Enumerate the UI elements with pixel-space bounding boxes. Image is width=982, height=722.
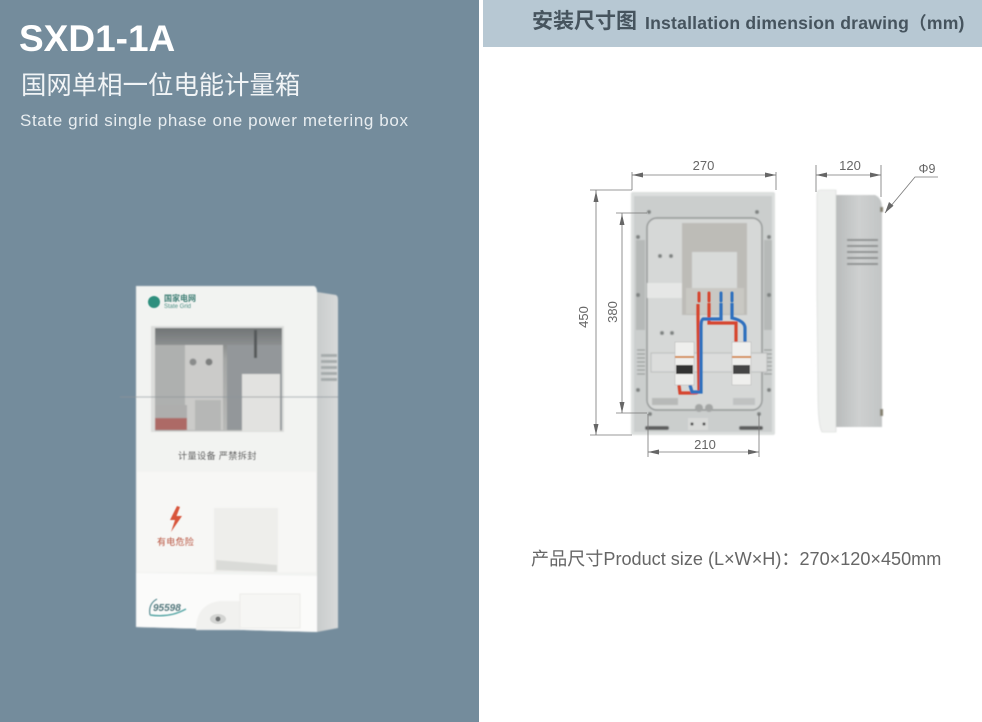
logo: state grid: State Grid bbox=[164, 304, 191, 310]
dimension: height 450 bbox=[576, 190, 632, 435]
label: metering notice: 计量设备 严禁拆封 bbox=[178, 450, 257, 461]
dimension: mounting height 380: 380 bbox=[605, 301, 620, 323]
heading: English installation drawing: Installation dimension drawing（mm) bbox=[645, 13, 965, 33]
dimension: depth 120 bbox=[816, 158, 881, 197]
logo: state grid: 国家电网 bbox=[164, 293, 196, 303]
icon: lightning warning: 有电危险 bbox=[157, 536, 194, 547]
panel: product photo bbox=[0, 0, 479, 722]
drawing: box interior view bbox=[631, 192, 775, 435]
title: model number: SXD1-1A bbox=[19, 18, 175, 59]
dimension: mounting width 210 bbox=[648, 414, 759, 457]
photo: metering box front view bbox=[120, 286, 338, 632]
subtitle: English product name: State grid single phase one power metering box bbox=[20, 111, 409, 130]
panel: installation drawing header bbox=[483, 0, 982, 47]
dimension: mounting width 210: 210 bbox=[694, 437, 716, 452]
subtitle: Chinese product name: 国网单相一位电能计量箱 bbox=[21, 72, 300, 100]
dimension: width 270 bbox=[632, 158, 776, 190]
heading: Chinese installation drawing: 安装尺寸图 bbox=[532, 10, 637, 33]
dimension: hole diameter bbox=[885, 162, 938, 213]
icon: lightning warning bbox=[157, 506, 194, 547]
icon: lock bbox=[210, 614, 226, 624]
dimension: hole diameter: Φ9 bbox=[919, 162, 936, 176]
dimension: mounting height 380 bbox=[605, 213, 647, 413]
logo: 95598 service: 95598 bbox=[153, 603, 181, 614]
dimension: width 270: 270 bbox=[693, 158, 714, 173]
wiring and breakers bbox=[675, 293, 751, 393]
caption: product size: 产品尺寸Product size (L×W×H)：270×120×450mm bbox=[531, 549, 941, 569]
drawing: box side view bbox=[817, 190, 883, 432]
logo: 95598 service bbox=[150, 599, 186, 616]
dimension: depth 120: 120 bbox=[839, 158, 861, 173]
dimension: height 450: 450 bbox=[576, 306, 591, 328]
logo: state grid bbox=[148, 293, 196, 310]
